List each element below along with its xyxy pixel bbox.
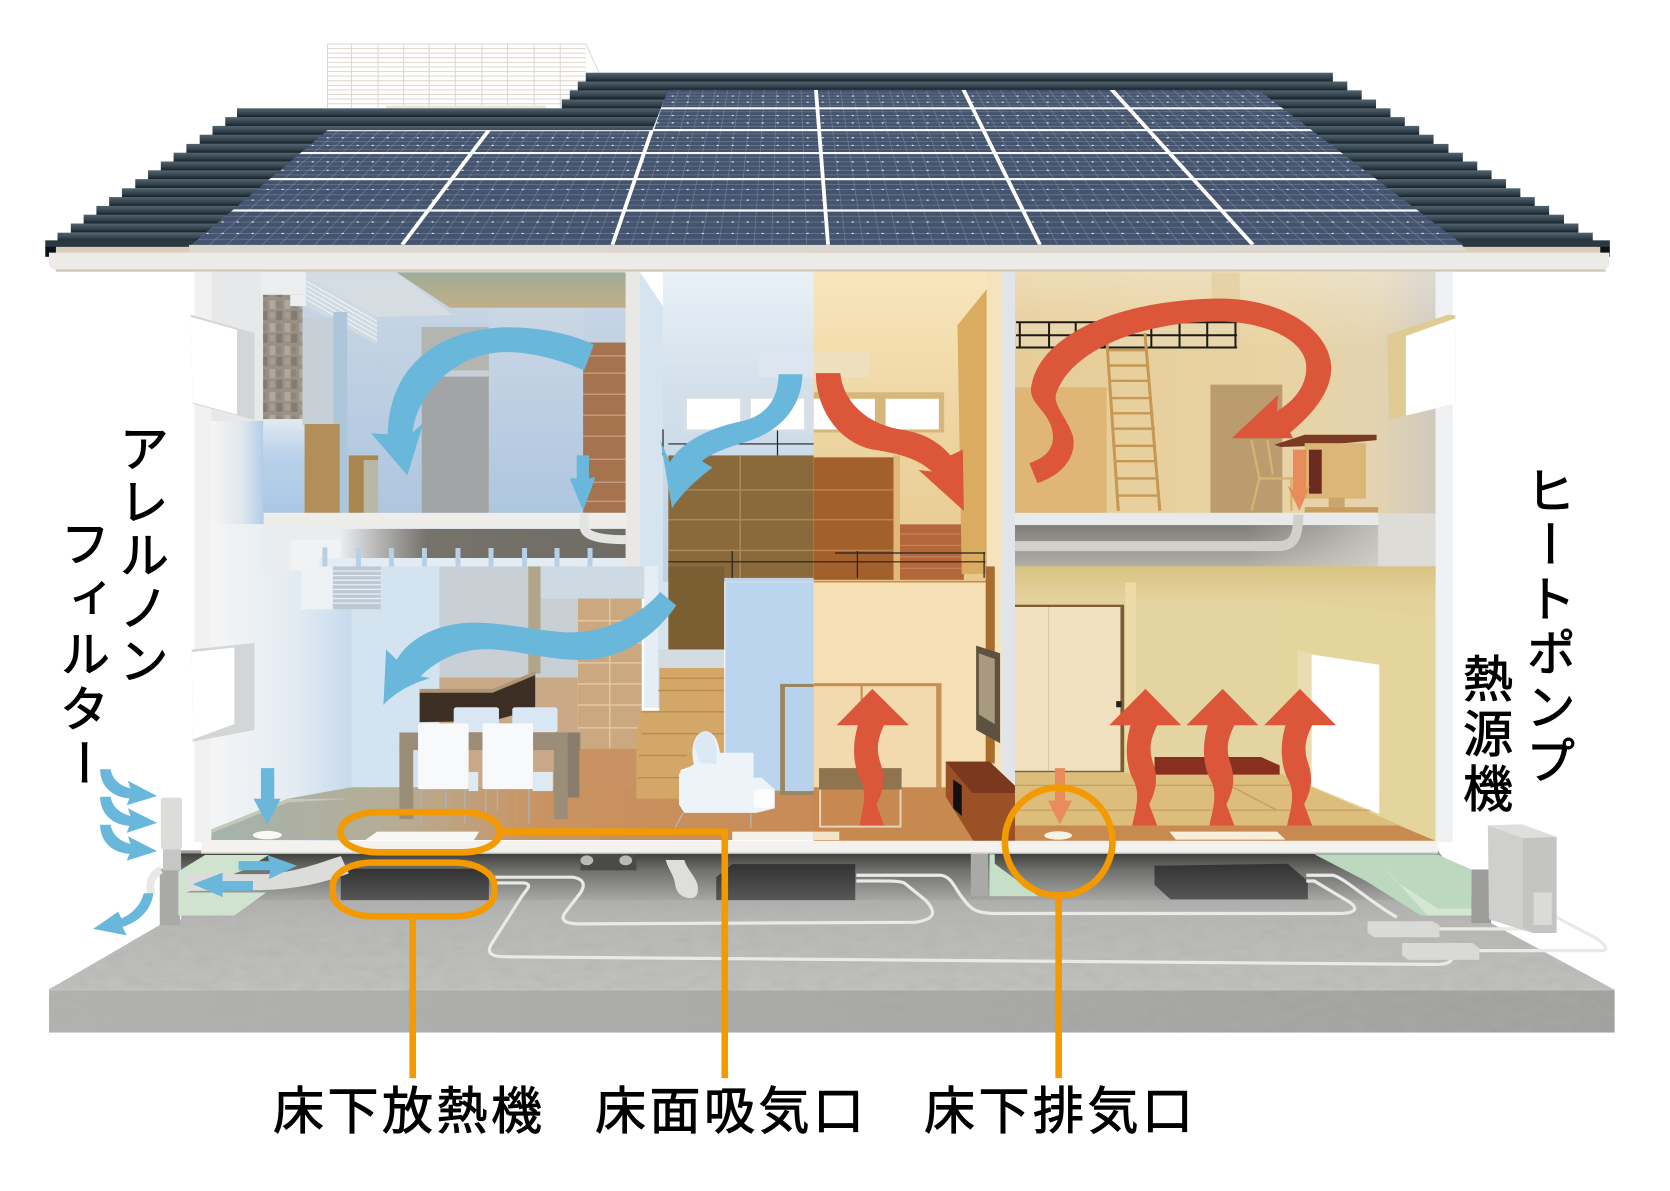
return duct xyxy=(1015,515,1298,546)
wood sill line xyxy=(814,581,987,582)
blue arrow from air conditioner xyxy=(660,374,803,508)
cell highlight dots xyxy=(192,96,1464,233)
warm floor xyxy=(814,787,987,841)
label: 熱源機: 熱源機 xyxy=(1456,653,1512,818)
sofa xyxy=(675,731,775,828)
leader to radiator label xyxy=(409,916,416,1078)
roof terrace lattice xyxy=(328,44,599,109)
green insulation xyxy=(178,854,1471,915)
stairs xyxy=(636,566,724,799)
center vertical wall left xyxy=(626,272,668,708)
label: ヒートポンプ: ヒートポンプ xyxy=(1519,465,1575,789)
blue arrow to floor inlet xyxy=(253,768,281,824)
floor xyxy=(211,787,814,840)
duct elbow left xyxy=(584,514,626,540)
fusuma door xyxy=(1015,605,1124,772)
bookshelf dark xyxy=(668,455,814,578)
label: アレルノン: アレルノン xyxy=(112,423,168,688)
upper right room xyxy=(1015,272,1436,514)
dining back wall xyxy=(439,566,578,677)
warm shoji xyxy=(814,683,942,795)
tatami floor xyxy=(1015,773,1436,841)
upper right floor slab xyxy=(1015,513,1378,525)
low wood panels xyxy=(1015,387,1107,513)
round exhaust xyxy=(1044,831,1072,840)
exhaust arrow downstairs xyxy=(1048,768,1072,824)
red arrow upper right loop xyxy=(1029,299,1331,483)
upper left room xyxy=(261,272,626,514)
lower right room xyxy=(1015,566,1436,842)
left exterior wall xyxy=(194,272,351,842)
louver soffit xyxy=(307,272,453,317)
upper right window xyxy=(1387,315,1455,420)
bookshelf xyxy=(578,599,642,749)
floor intake grille centre xyxy=(732,832,814,840)
heat pump outdoor unit xyxy=(1488,824,1557,933)
ceiling void left xyxy=(264,525,626,571)
right ceiling void xyxy=(1015,514,1436,568)
exhaust arrow upstairs xyxy=(1288,450,1310,511)
ring around floor intake xyxy=(341,812,500,852)
air conditioner warm side xyxy=(814,351,870,377)
foundation walls xyxy=(160,853,1491,925)
wood floor band xyxy=(1015,826,1436,841)
pale blue partitions xyxy=(351,566,439,792)
solar panels xyxy=(192,90,1464,245)
ring around floor exhaust xyxy=(1005,788,1112,896)
cream wall cut and divider xyxy=(987,272,1015,842)
center room orange half xyxy=(814,272,989,582)
left windows xyxy=(191,315,255,742)
leader to intake label xyxy=(500,832,725,1078)
ladder xyxy=(1107,333,1160,511)
pipe junction boxes xyxy=(1368,921,1479,960)
white partition xyxy=(644,566,658,708)
underfloor space xyxy=(160,853,1606,964)
fan boxes xyxy=(580,854,636,870)
eaves fascia xyxy=(49,245,1609,272)
windows warm side xyxy=(814,392,944,432)
duct arrow to left xyxy=(193,873,253,897)
air flow arrows: cool (blue) xyxy=(93,327,803,935)
wood post xyxy=(986,566,995,764)
louvre box xyxy=(301,566,381,609)
blue arrow upper left curve xyxy=(371,327,594,475)
duct drop xyxy=(666,860,698,898)
warm grille xyxy=(814,832,839,840)
louver xyxy=(307,277,377,345)
ceiling xyxy=(397,272,626,308)
exhaust arrow xyxy=(93,893,153,935)
front chairs xyxy=(418,723,553,824)
filter intake arrows xyxy=(100,769,157,861)
clerestory windows xyxy=(682,393,814,432)
back chairs xyxy=(454,707,558,732)
leader to exhaust label xyxy=(1055,896,1062,1078)
door opening xyxy=(422,327,489,513)
blue wave arrow lower xyxy=(383,592,676,705)
concrete foundation slab xyxy=(49,850,1615,1033)
blue shoji xyxy=(780,684,814,795)
air conditioner xyxy=(759,351,814,377)
floor intake grille left xyxy=(365,832,479,840)
upper left window xyxy=(191,315,255,420)
chair xyxy=(1251,440,1299,511)
door niche xyxy=(1210,385,1282,513)
floor intake round left xyxy=(253,831,282,839)
wood panel xyxy=(583,343,626,513)
blue brick wall xyxy=(725,582,814,791)
label: 床下放熱機: 床下放熱機 xyxy=(273,1083,546,1140)
right exterior wall xyxy=(1387,272,1455,842)
air flow arrows: warm (red) xyxy=(816,299,1336,826)
skirting xyxy=(211,799,351,833)
wall tv xyxy=(976,646,1000,743)
faded orange down arrows xyxy=(1048,450,1310,824)
ceiling band xyxy=(1015,566,1436,599)
brick side wall xyxy=(957,289,987,574)
coffee table xyxy=(819,768,902,827)
bookshelf warm xyxy=(814,455,900,580)
window opening xyxy=(1297,649,1379,814)
warm brick wall xyxy=(814,582,987,791)
railing xyxy=(663,429,814,578)
concrete mottling xyxy=(208,974,1587,990)
solar cell grid xyxy=(192,90,1456,245)
blue arrow down to duct xyxy=(570,455,595,511)
red rising arrows xyxy=(837,689,1336,826)
label: 床面吸気口: 床面吸気口 xyxy=(595,1083,868,1140)
center room blue half xyxy=(663,272,814,582)
label: 床下排気口: 床下排気口 xyxy=(924,1083,1197,1140)
first floor slab xyxy=(201,841,1438,854)
duct arrow to right xyxy=(239,855,297,879)
wall section xyxy=(302,318,334,425)
tv cabinet xyxy=(946,762,1022,841)
kitchen counter xyxy=(420,672,535,722)
red arrow from air conditioner xyxy=(816,373,964,511)
stairs warm xyxy=(900,524,964,580)
roof tiles xyxy=(45,73,1610,257)
module frames xyxy=(192,108,1464,210)
floor grille right xyxy=(1169,832,1286,840)
lower central warm half xyxy=(814,566,1022,841)
floor radiator units xyxy=(341,864,1308,900)
desk xyxy=(1274,435,1378,512)
lower left room interior xyxy=(211,566,814,840)
raised red platform xyxy=(1155,757,1280,775)
outdoor air intake pipe xyxy=(150,798,182,894)
label: フィルター: フィルター xyxy=(53,518,109,793)
side wall xyxy=(1280,599,1436,841)
back wall xyxy=(1136,599,1280,774)
ventilation pipes xyxy=(489,875,1606,964)
orange callout lines xyxy=(333,788,1112,1078)
air duct xyxy=(186,856,349,891)
black lattice window xyxy=(1016,322,1237,348)
lower left window xyxy=(192,643,255,742)
upper floor slab left xyxy=(264,513,626,525)
dining table xyxy=(399,733,580,819)
stone pillar xyxy=(263,295,302,429)
wooden cabinets xyxy=(305,424,340,513)
ring around floor radiator xyxy=(333,863,494,916)
